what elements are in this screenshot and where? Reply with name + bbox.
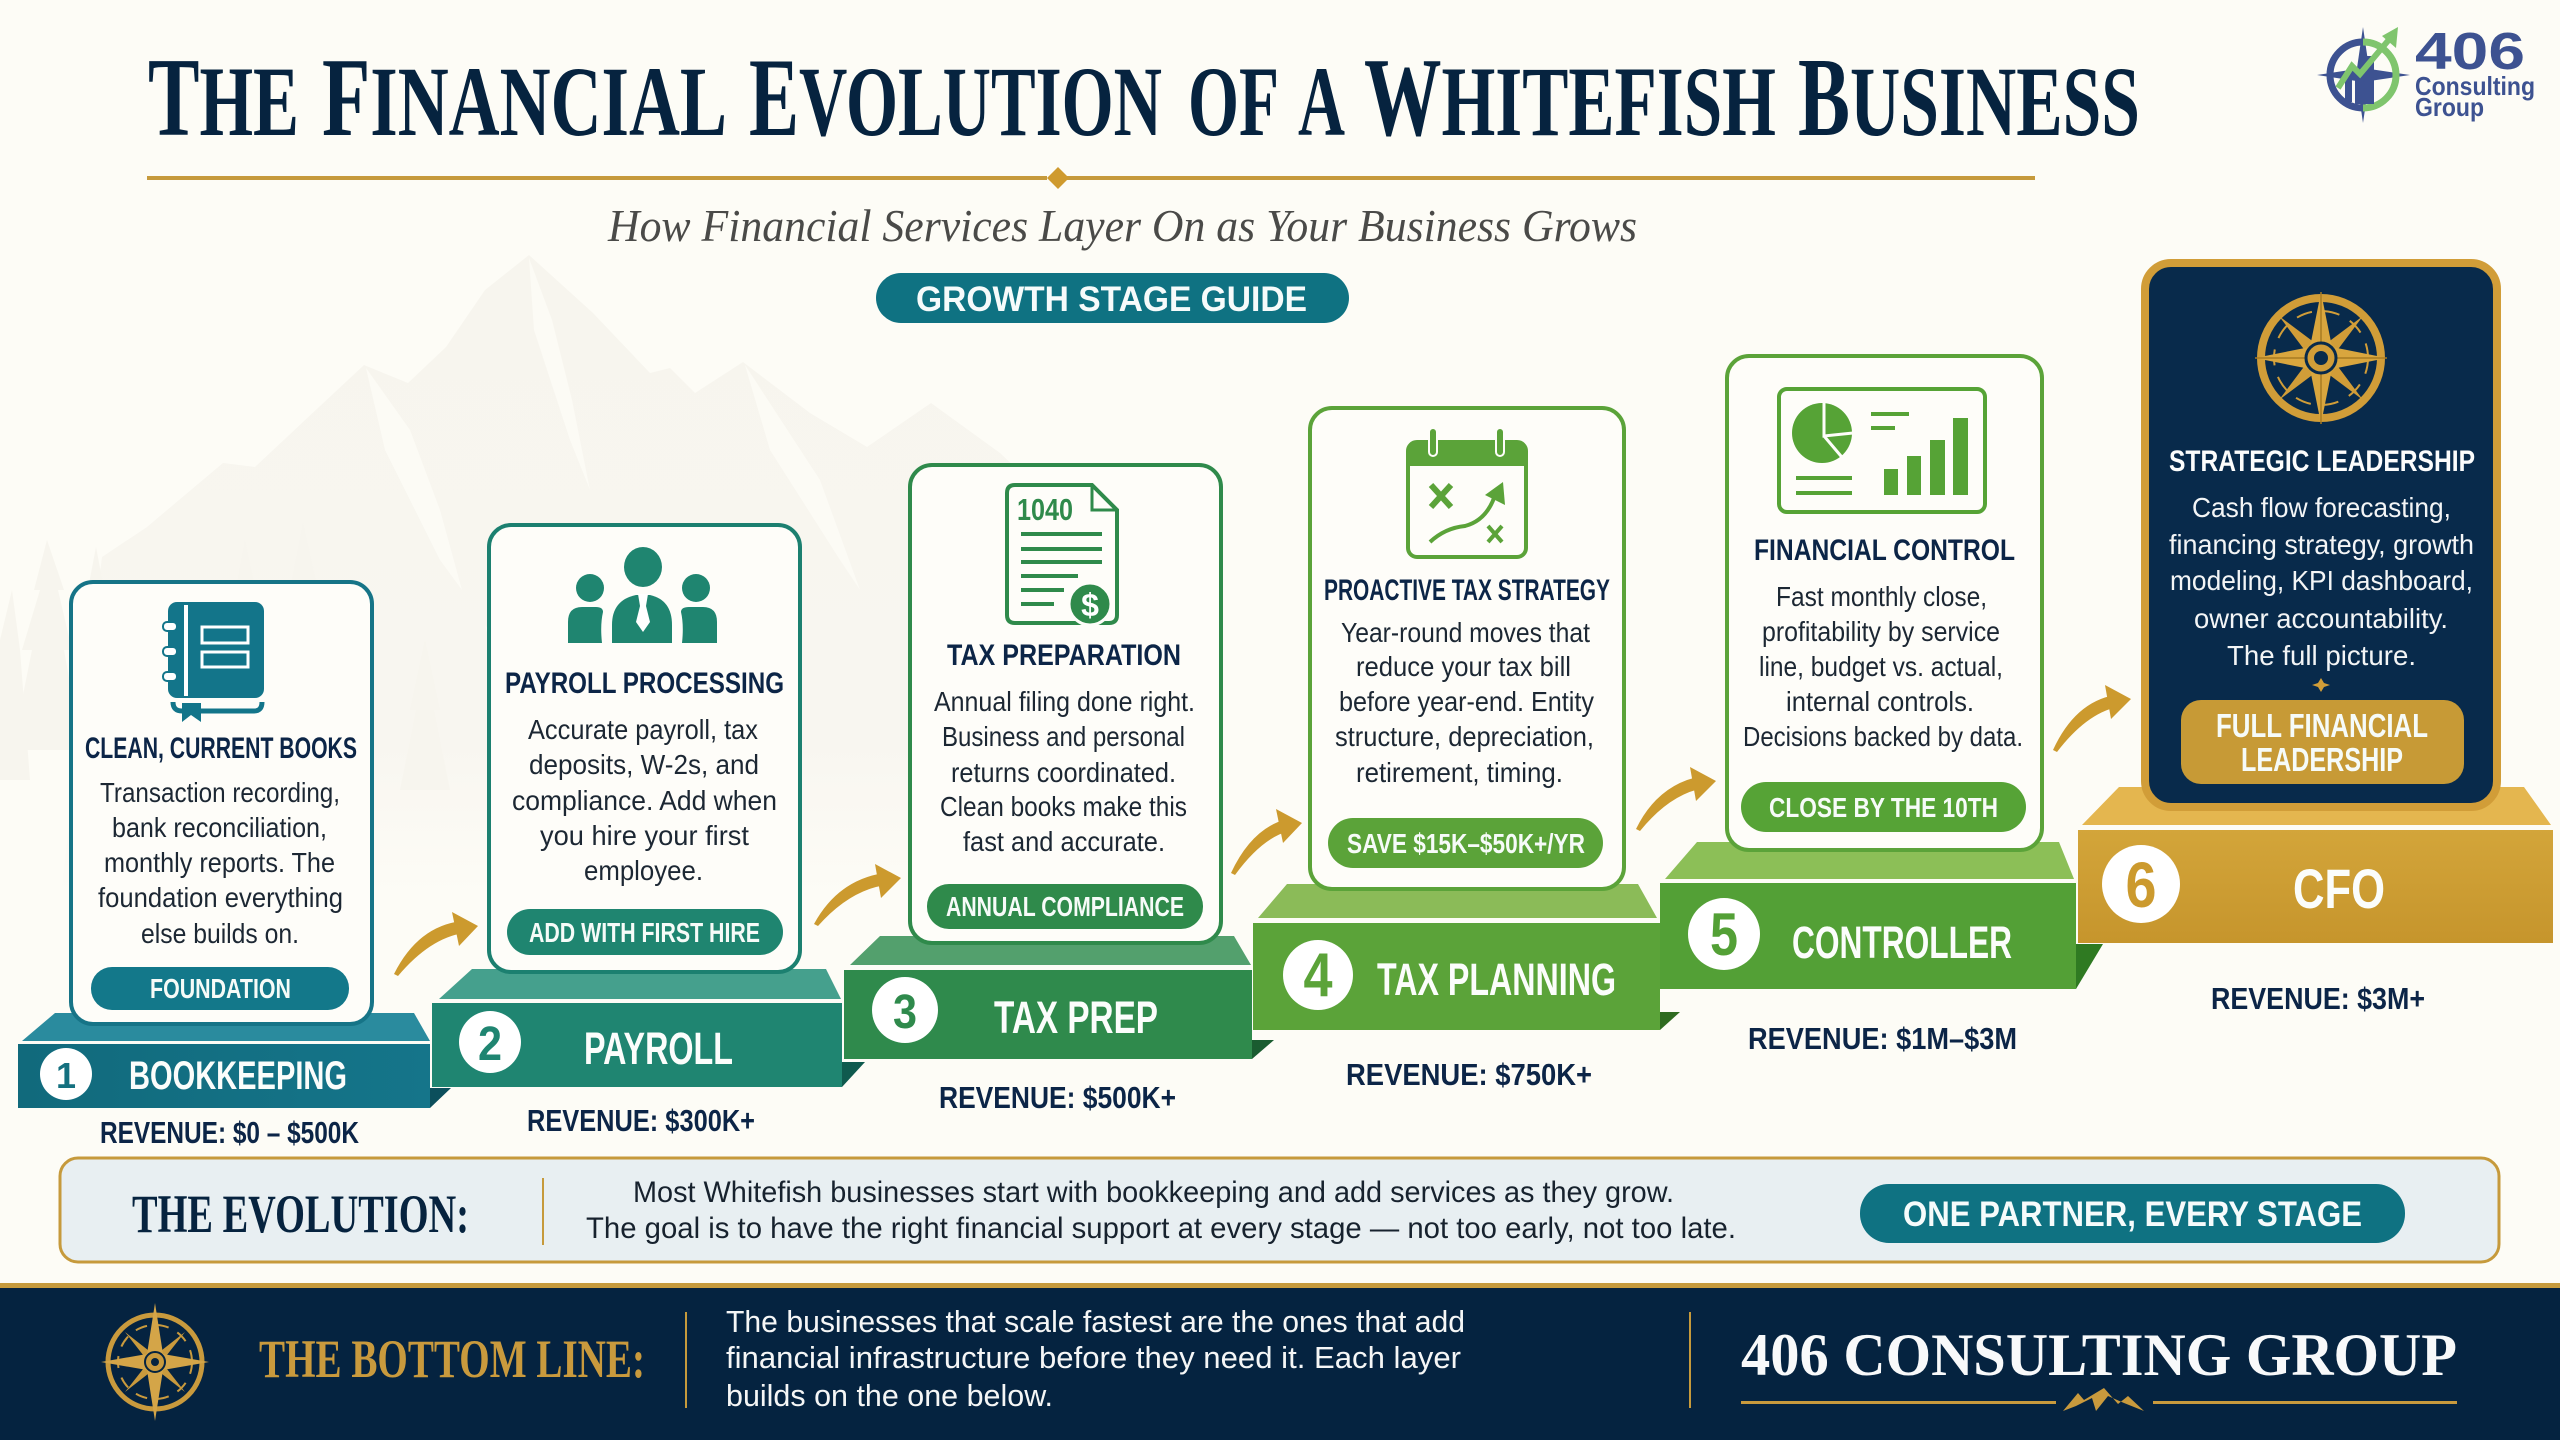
icon: footer compass [101, 1303, 209, 1421]
panel: the evolution [60, 1158, 2499, 1262]
pill: full financial leadership: FULL FINANCIAL [2216, 707, 2428, 744]
heading 4: PROACTIVE TAX STRATEGY [1324, 574, 1610, 607]
pill: foundation: FOUNDATION [150, 973, 291, 1004]
step 3: tax prep [844, 465, 1274, 1115]
icon: tax strategy calendar [1408, 428, 1526, 557]
stage name 4: TAX PLANNING [1377, 954, 1616, 1005]
step 4: tax planning [1253, 408, 1680, 1092]
body text 1 [98, 777, 343, 949]
evolution text: Most Whitefish businesses start with bookkeeping and add services as they grow. [633, 1176, 1674, 1209]
pill: full financial leadership: LEADERSHIP [2241, 741, 2403, 778]
number badge 5: 5 [1710, 901, 1738, 968]
icon: financial dashboard [1779, 389, 1985, 512]
icon: logo compass [2317, 27, 2410, 123]
number badge 6 [2102, 845, 2180, 923]
evolution text [586, 1176, 1736, 1245]
evolution text: The goal is to have the right financial support at every stage — not too early, not too late. [586, 1212, 1736, 1245]
number badge 6: 6 [2126, 849, 2156, 921]
title: EVOLUTION [749, 36, 1162, 160]
revenue 2: REVENUE: $300K+ [527, 1103, 755, 1138]
heading 6: STRATEGIC LEADERSHIP [2169, 445, 2475, 478]
heading 1: CLEAN, CURRENT BOOKS [85, 732, 357, 765]
stage name 1: BOOKKEEPING [129, 1054, 347, 1098]
icon: compass [2255, 292, 2387, 424]
card 5 [1727, 356, 2042, 850]
bottom line text: The businesses that scale fastest are the ones that add [726, 1304, 1465, 1339]
number badge 4: 4 [1304, 941, 1333, 1010]
pill: full financial leadership [2181, 700, 2464, 784]
body text 4: retirement, timing. [1356, 757, 1563, 788]
bottom line text: builds on the one below. [726, 1378, 1053, 1413]
step 1: bookkeeping [18, 582, 451, 1150]
icon: 1040 tax form [1007, 485, 1117, 625]
pill: annual compliance [927, 884, 1203, 929]
body text 4: structure, depreciation, [1335, 721, 1594, 752]
body text 3: Clean books make this [940, 791, 1187, 822]
pill: add with first hire [507, 909, 783, 955]
stage name 5: CONTROLLER [1792, 917, 2012, 968]
icon: people [568, 547, 717, 643]
body text 4: before year-end. Entity [1339, 686, 1594, 717]
revenue 3: REVENUE: $500K+ [939, 1080, 1176, 1115]
revenue 5: REVENUE: $1M–$3M [1748, 1021, 2017, 1056]
body text 2: deposits, W-2s, and [529, 749, 759, 780]
body text 6: modeling, KPI dashboard, [2170, 565, 2473, 596]
body text 6: owner accountability. [2194, 603, 2448, 634]
body text 1: bank reconciliation, [112, 812, 327, 843]
pill: close by the 10th: CLOSE BY THE 10TH [1769, 792, 1998, 823]
card 2 [489, 525, 800, 972]
badge: growth stage guide: GROWTH STAGE GUIDE [916, 280, 1307, 319]
number badge 1 [40, 1048, 92, 1100]
brand name: 406 CONSULTING GROUP [1741, 1322, 2457, 1388]
background mountains and trees [0, 255, 1100, 900]
body text 2: employee. [584, 855, 703, 886]
number badge 3: 3 [893, 986, 917, 1039]
step platform 3 [844, 936, 1274, 1059]
body text 1: monthly reports. The [104, 847, 335, 878]
number badge 5 [1688, 898, 1760, 970]
body text 5: Decisions backed by data. [1743, 721, 2023, 752]
pill: add with first hire: ADD WITH FIRST HIRE [529, 917, 760, 948]
heading: the bottom line: THE BOTTOM LINE: [259, 1329, 645, 1389]
body text 4: reduce your tax bill [1356, 651, 1571, 682]
body text 1: else builds on. [141, 918, 299, 949]
title: OF [1188, 46, 1279, 157]
arrow 2 [814, 864, 901, 926]
badge: growth stage guide [876, 273, 1349, 323]
logo: 406 Consulting Group [2317, 23, 2535, 123]
body text 1: foundation everything [98, 882, 343, 913]
number badge 2 [459, 1011, 521, 1073]
card 4 [1310, 408, 1624, 889]
body text 5: line, budget vs. actual, [1759, 651, 2003, 682]
arrow 5 [2053, 685, 2131, 752]
title: THE [148, 36, 299, 160]
heading 5: FINANCIAL CONTROL [1754, 534, 2015, 567]
step 5: controller [1660, 356, 2103, 1056]
heading 3: TAX PREPARATION [947, 639, 1181, 672]
step platform 1 [18, 1013, 451, 1108]
pill: foundation [91, 967, 349, 1010]
body text 5: internal controls. [1786, 686, 1974, 717]
arrow 4 [1636, 767, 1716, 831]
bottom line text: financial infrastructure before they need it. Each layer [726, 1340, 1461, 1375]
body text 3: Annual filing done right. [934, 686, 1195, 717]
revenue 1: REVENUE: $0 – $500K [100, 1115, 359, 1150]
body text 6: The full picture. [2227, 640, 2416, 671]
footer band [0, 1283, 2560, 1440]
title rule with diamond [147, 167, 2035, 189]
title [148, 36, 2140, 160]
pill: annual compliance: ANNUAL COMPLIANCE [946, 891, 1184, 922]
step platform 4 [1253, 884, 1680, 1030]
pill: one partner [1860, 1184, 2405, 1243]
body text 3: Business and personal [942, 721, 1185, 752]
body text 5 [1743, 581, 2023, 752]
bottom line text [726, 1304, 1465, 1413]
brand rule with mountain [1741, 1388, 2457, 1411]
card 3 [910, 465, 1221, 943]
body text 5: Fast monthly close, [1776, 581, 1987, 612]
body text 2: compliance. Add when [512, 785, 777, 816]
body text 3: returns coordinated. [951, 757, 1176, 788]
body text 1: Transaction recording, [100, 777, 340, 808]
arrow 3 [1231, 809, 1302, 875]
body text 4: Year-round moves that [1341, 617, 1590, 648]
icon: 1040 tax form: 1040 [1017, 492, 1073, 527]
logo: 406 Consulting Group: Consulting [2415, 71, 2535, 101]
step platform 5 [1660, 842, 2103, 989]
pill: close by the 10th [1741, 782, 2026, 832]
body text 2 [512, 714, 777, 886]
body text 6: financing strategy, growth [2169, 529, 2474, 560]
body text 4 [1335, 617, 1594, 788]
number badge 2: 2 [478, 1018, 502, 1071]
heading: the evolution: THE EVOLUTION: [132, 1184, 469, 1244]
sparkle [2312, 678, 2330, 692]
icon: 1040 tax form: $ [1081, 587, 1099, 623]
number badge 4 [1283, 940, 1353, 1010]
stage name 3: TAX PREP [994, 992, 1158, 1043]
logo: 406 Consulting Group: Group [2415, 92, 2484, 122]
revenue 4: REVENUE: $750K+ [1346, 1057, 1592, 1092]
stage name 6: CFO [2293, 857, 2385, 920]
subtitle: How Financial Services Layer On as Your Business Grows [607, 200, 1637, 251]
logo: 406 Consulting Group: 406 [2415, 23, 2525, 81]
stage name 2: PAYROLL [584, 1023, 733, 1074]
title: BUSINESS [1798, 36, 2140, 160]
body text 2: you hire your first [540, 820, 749, 851]
heading 2: PAYROLL PROCESSING [505, 667, 784, 700]
title: A [1298, 46, 1345, 157]
icon: book [163, 602, 264, 722]
step platform 2 [432, 969, 865, 1087]
pill: save [1328, 818, 1603, 868]
step 6: CFO [2078, 263, 2553, 1016]
pill: one partner: ONE PARTNER, EVERY STAGE [1903, 1195, 2362, 1234]
body text 5: profitability by service [1762, 616, 2000, 647]
card 6 [2145, 263, 2497, 807]
number badge 1: 1 [56, 1055, 76, 1096]
body text 2: Accurate payroll, tax [528, 714, 758, 745]
pill: save: SAVE $15K–$50K+/YR [1347, 828, 1585, 859]
body text 3: fast and accurate. [963, 826, 1165, 857]
body text 6: Cash flow forecasting, [2192, 492, 2451, 523]
title: WHITEFISH [1364, 36, 1776, 160]
title: FINANCIAL [322, 36, 727, 160]
card 1 [71, 582, 372, 1024]
step platform 6 [2078, 787, 2553, 943]
revenue 6: REVENUE: $3M+ [2211, 981, 2425, 1016]
number badge 3 [872, 977, 938, 1043]
body text 3 [934, 686, 1195, 857]
body text 6 [2169, 492, 2474, 671]
arrow 1 [394, 912, 478, 976]
step 2: payroll [432, 525, 865, 1138]
